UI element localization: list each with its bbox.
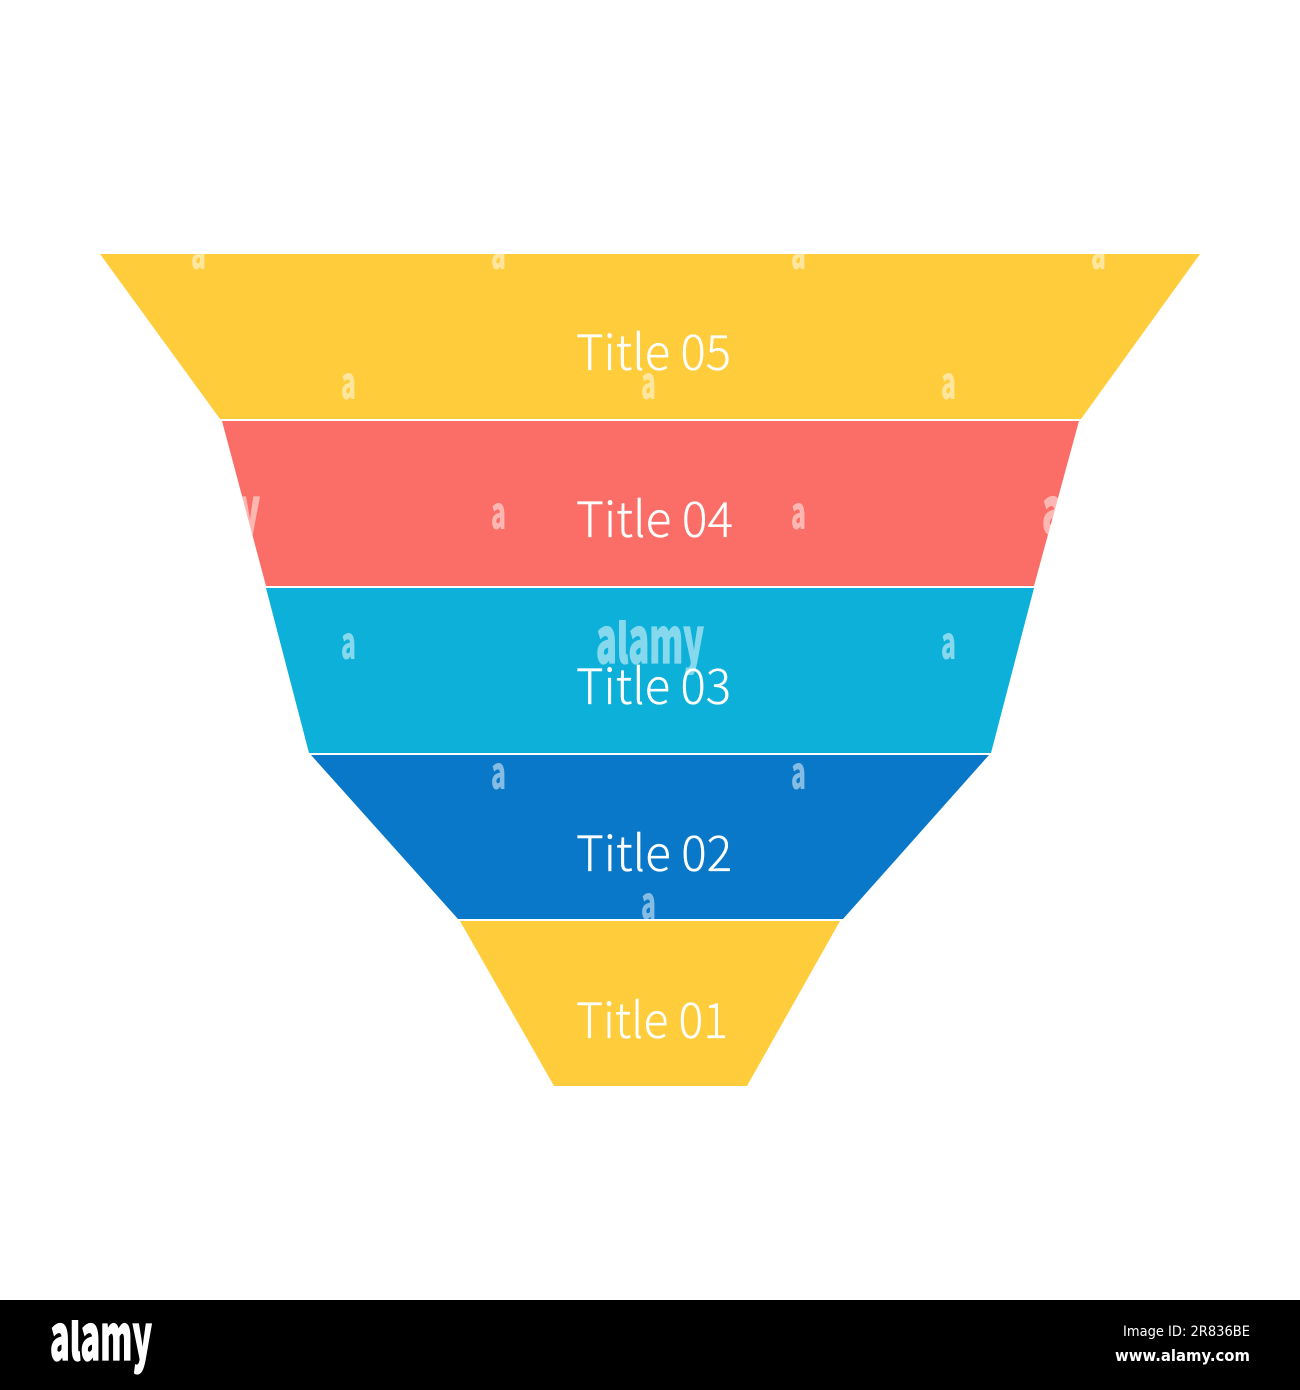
- watermark pattern: a: [1091, 217, 1106, 282]
- image id: Image ID: 2R836BE: [1123, 1324, 1250, 1340]
- funnel tier: Title 05: Title 05: [576, 314, 731, 385]
- footer logo: alamy: [50, 1288, 152, 1379]
- watermark pattern: a: [791, 217, 806, 282]
- watermark pattern: alamy: [152, 461, 260, 552]
- footer bar: [0, 1300, 1300, 1390]
- watermark pattern: [192, 254, 1104, 919]
- website url: www.alamy.com: [1115, 1346, 1250, 1365]
- watermark pattern: a: [191, 217, 206, 282]
- watermark pattern: a: [491, 737, 506, 802]
- funnel tier: Title 03: [266, 588, 1034, 753]
- watermark pattern: a: [641, 867, 656, 932]
- watermark pattern: a: [791, 737, 806, 802]
- watermark pattern: a: [341, 347, 356, 412]
- watermark pattern: alamy: [596, 591, 704, 682]
- funnel tier: Title 01: [460, 921, 840, 1086]
- funnel tier: Title 02: Title 02: [576, 815, 732, 886]
- funnel tier: Title 01: Title 01: [576, 982, 728, 1053]
- watermark pattern: a: [941, 607, 956, 672]
- funnel tier: Title 04: [222, 421, 1079, 586]
- watermark pattern: alamy: [1042, 461, 1150, 552]
- watermark pattern: a: [641, 347, 656, 412]
- funnel tier: Title 03: Title 03: [576, 648, 731, 719]
- watermark pattern: a: [491, 477, 506, 542]
- watermark pattern: a: [791, 477, 806, 542]
- funnel tier: Title 04: Title 04: [576, 481, 733, 552]
- watermark pattern: a: [941, 347, 956, 412]
- funnel tier: Title 02: [311, 755, 989, 919]
- watermark pattern: a: [491, 217, 506, 282]
- funnel tier: Title 05: [100, 254, 1200, 419]
- watermark pattern: a: [341, 607, 356, 672]
